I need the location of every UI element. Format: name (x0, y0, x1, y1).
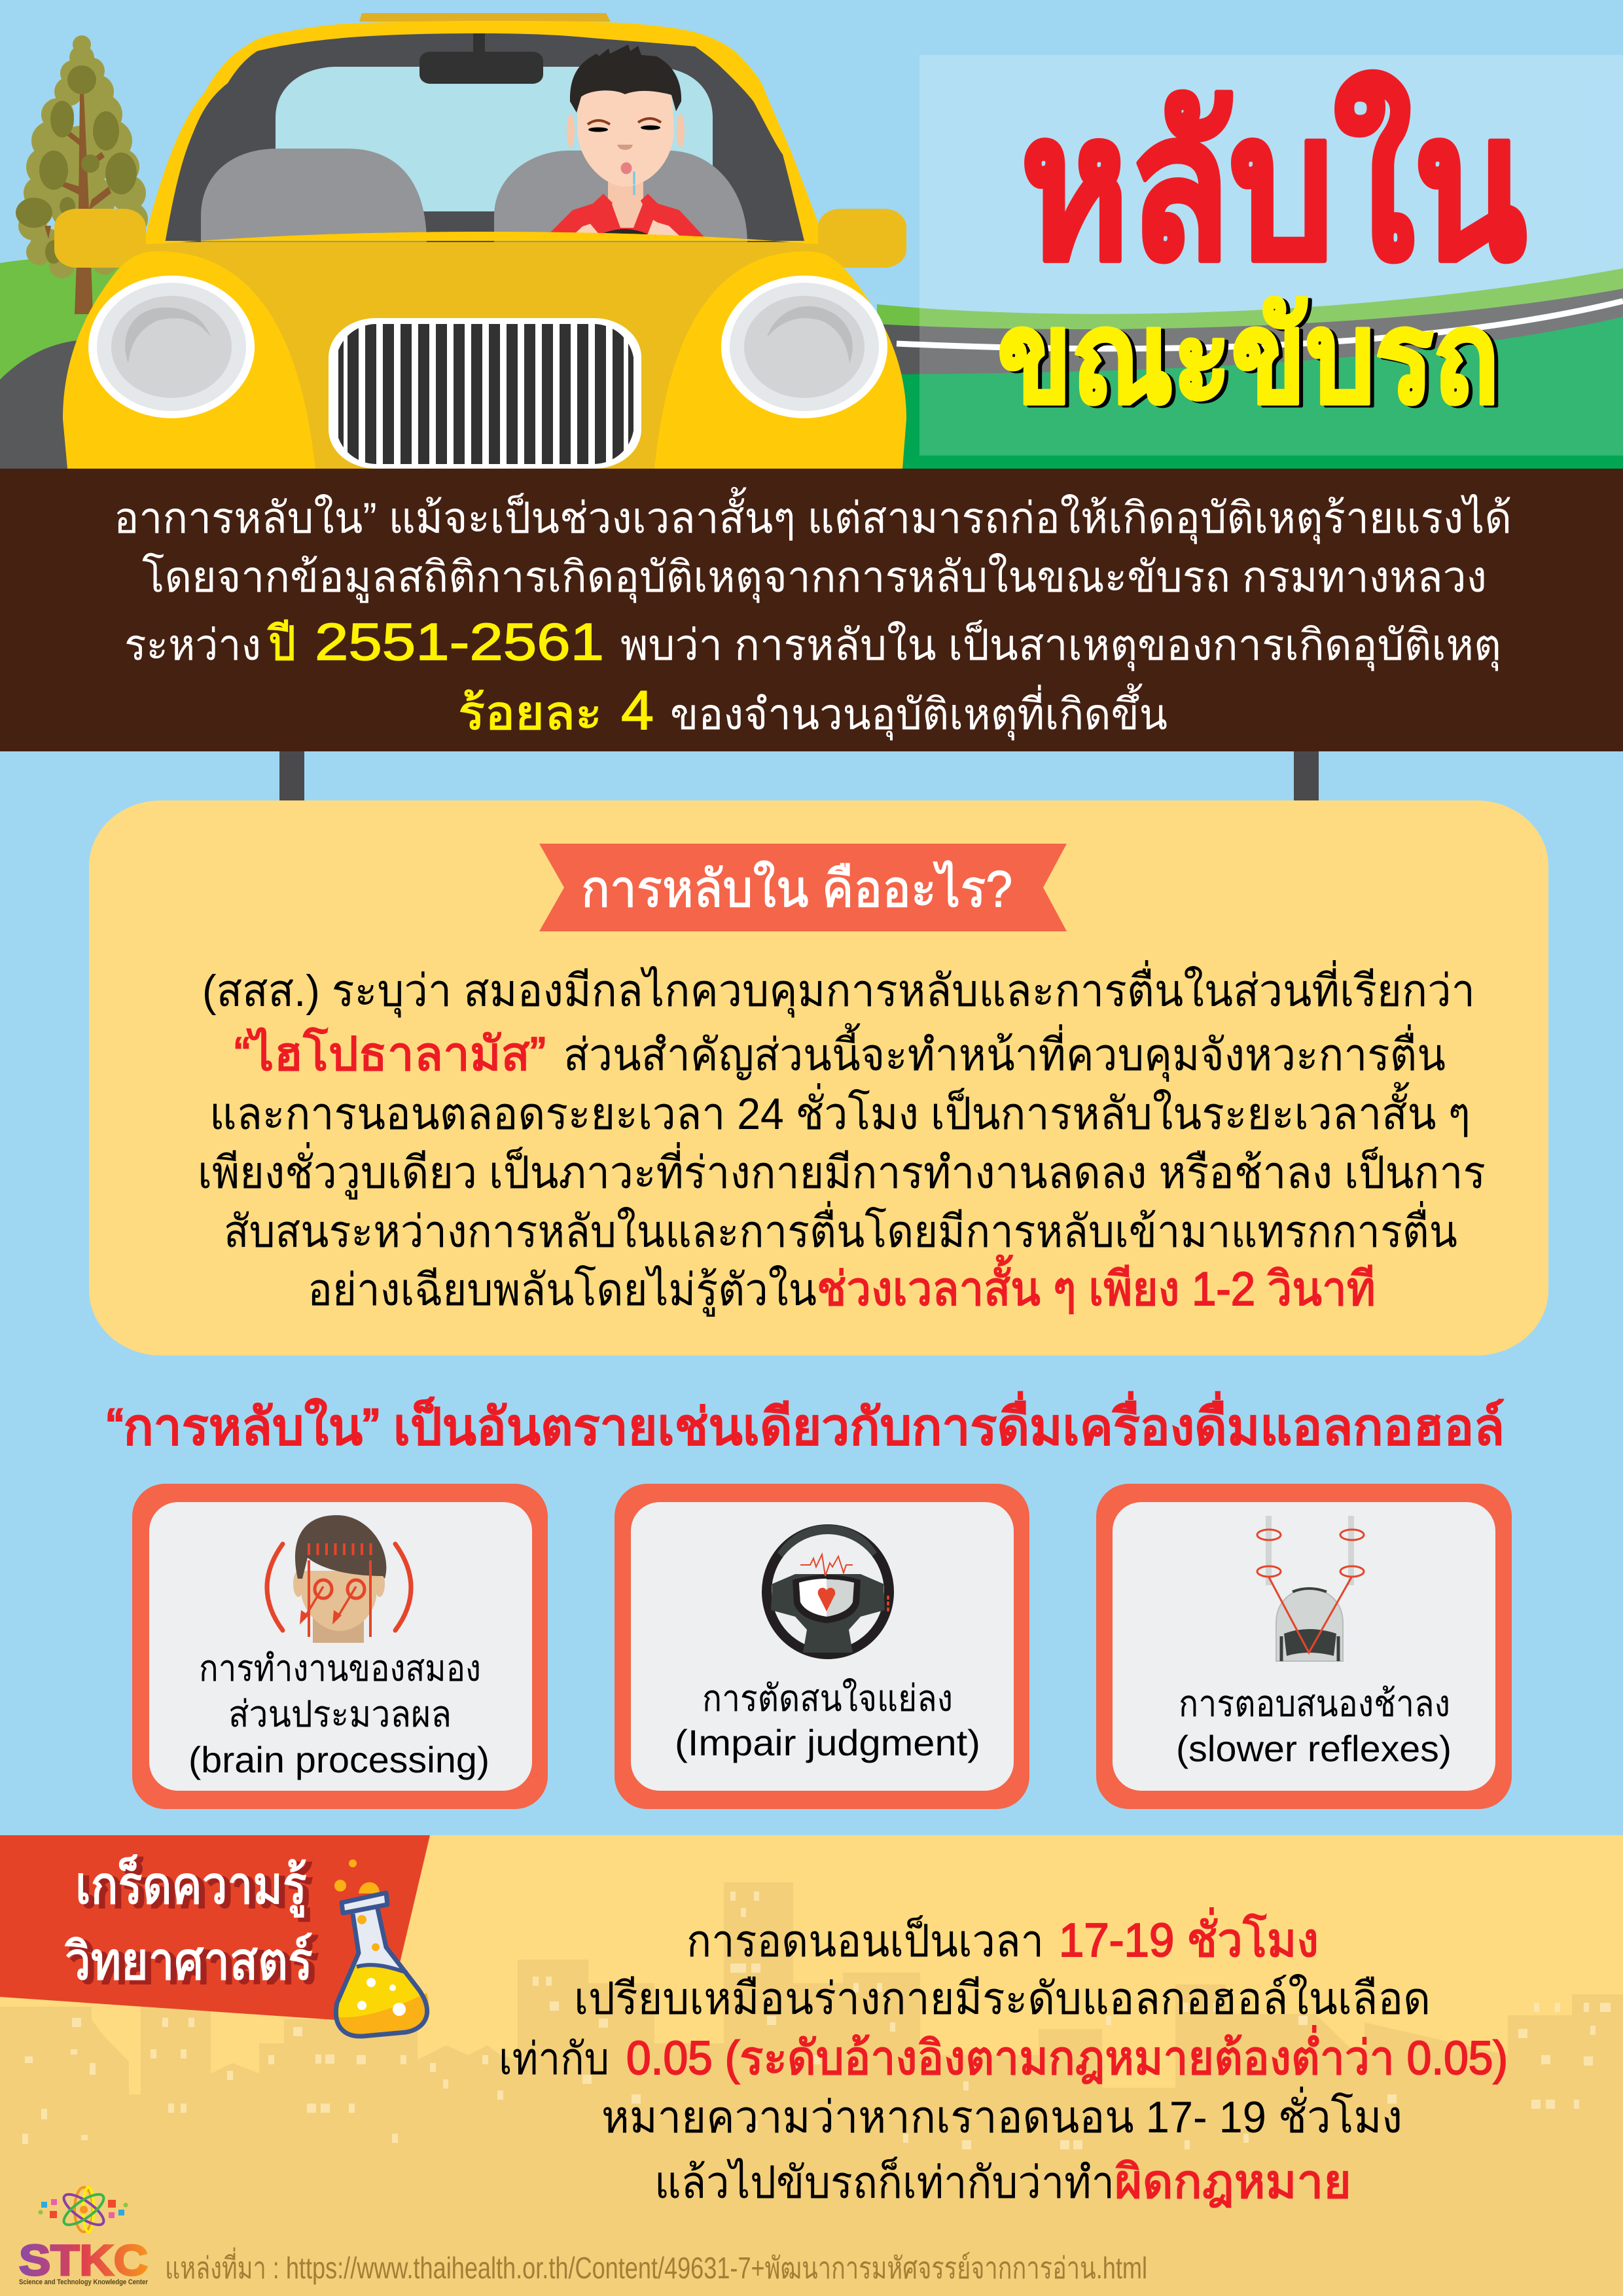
car roof (143, 21, 827, 244)
paragraph (198, 960, 1486, 1317)
card: impaired judgment: (Impair judgment) (675, 1722, 980, 1763)
fact text: 0.05 (ระดับอ้างอิงตามกฎหมายต้องต่ำว่า 0.05) (626, 2026, 1508, 2085)
intro line 3 (124, 613, 1501, 672)
car hood (128, 242, 841, 469)
card: brain processing (132, 1484, 548, 1809)
paragraph: (สสส.) ระบุว่า สมองมีกลไกควบคุมการหลับและการตื่นในส่วนที่เรียกว่า (202, 960, 1475, 1018)
side mirrors (54, 209, 906, 268)
fact text: เท่ากับ (499, 2034, 609, 2084)
panel: what is microsleep (89, 800, 1548, 1355)
right headlight (721, 276, 887, 418)
card: impaired judgment: การตัดสนใจแย่ลง (702, 1677, 953, 1719)
driver (549, 45, 705, 238)
intro line 3: พบว่า การหลับใน เป็นสาเหตุของการเกิดอุบัติเหตุ (620, 619, 1501, 672)
banner heading: วิทยาศาสตร์ (65, 1932, 313, 1990)
windshield (276, 67, 713, 216)
left fender (63, 251, 315, 469)
card: impaired judgment (615, 1484, 1029, 1809)
icon: tree (16, 35, 148, 314)
fact text: หมายความว่าหากเราอดนอน 17- 19 ชั่วโมง (601, 2087, 1402, 2142)
fact text: เปรียบเหมือนร่างกายมีระดับแอลกอฮอล์ในเลือด (574, 1973, 1431, 2024)
logo atom mark (38, 2187, 128, 2232)
right fender (654, 251, 906, 469)
card: brain processing: การทำงานของสมอง (199, 1647, 481, 1689)
icon: car view lines (1257, 1516, 1364, 1661)
logo wordmark: STKC (19, 2236, 148, 2284)
intro line 3: 2551-2561 (315, 613, 604, 671)
paragraph: ช่วงเวลาสั้น ๆ เพียง 1-2 วินาที (817, 1255, 1376, 1316)
heading: danger like alcohol: “การหลับใน” เป็นอันตรายเช่นเดียวกับการดื่มเครื่องดื่มแอลกอฮอล์ (107, 1392, 1505, 1456)
dash (419, 211, 504, 244)
card: brain processing: (brain processing) (188, 1739, 490, 1780)
panel: intro statistics band (0, 469, 1623, 751)
paragraph: และการนอนตลอดระยะเวลา 24 ชั่วโมง เป็นการหลับในระยะเวลาสั้น ๆ (209, 1082, 1471, 1139)
ribbon heading (539, 844, 1067, 931)
paragraph: เพียงชั่ววูบเดียว เป็นภาวะที่ร่างกายมีการทำงานลดลง หรือช้าลง เป็นการ (198, 1142, 1486, 1200)
paragraph: สับสนระหว่างการหลับในและการตื่นโดยมีการหลับเข้ามาแทรกการตื่น (224, 1201, 1457, 1257)
card: slower reflexes: การตอบสนองช้าลง (1179, 1683, 1450, 1724)
radiator grille (329, 318, 641, 469)
intro line 4: ของจำนวนอุบัติเหตุที่เกิดขึ้น (670, 683, 1168, 741)
rear-view mirror (419, 33, 543, 84)
intro line 3: ระหว่าง (124, 620, 261, 669)
icon: science flask (334, 1859, 429, 2036)
fact text: แล้วไปขับรถก็เท่ากับว่าทำ (654, 2157, 1115, 2208)
banner heading: วิทยาศาสตร์ (70, 1935, 318, 1994)
banner: science fact (0, 1835, 430, 2021)
paragraph: ส่วนสำคัญส่วนนี้จะทำหน้าที่ควบคุมจังหวะการตื่น (563, 1023, 1446, 1082)
left headlight (88, 276, 255, 418)
paragraph: “ไฮโปธาลามัส” (234, 1027, 546, 1081)
paragraph: อย่างเฉียบพลันโดยไม่รู้ตัวใน (308, 1265, 817, 1317)
source line: แหล่งที่มา : https://www.thaihealth.or.th/Content/49631-7+พัฒนาการมหัศจรรย์จากการอ่าน.html (165, 2247, 1147, 2285)
banner heading: เกร็ดความรู้ (80, 1857, 312, 1920)
subtitle: ขณะขับรถ: ขณะขับรถ (1001, 288, 1503, 431)
card: slower reflexes (1096, 1484, 1512, 1809)
card: brain processing: ส่วนประมวลผล (228, 1693, 452, 1734)
fact text (499, 1908, 1508, 2208)
hood top edge (143, 232, 827, 244)
panel: science fact background with city (0, 1835, 1623, 2296)
subtitle: ขณะขับรถ: ขณะขับรถ (997, 286, 1499, 429)
intro line 4: ร้อยละ (458, 687, 602, 740)
intro line 1: อาการหลับใน” แม้จะเป็นช่วงเวลาสั้นๆ แต่สามารถก่อให้เกิดอุบัติเหตุร้ายแรงได้ (114, 487, 1512, 545)
title backdrop panel (919, 55, 1623, 456)
banner heading: เกร็ดความรู้ (75, 1854, 307, 1917)
illustration: yellow car with sleepy driver (54, 13, 906, 469)
fact text: การอดนอนเป็นเวลา (687, 1915, 1044, 1966)
intro line 4: 4 (621, 679, 654, 741)
car interior (165, 33, 805, 243)
icon: head (267, 1515, 411, 1643)
card: slower reflexes: (slower reflexes) (1176, 1728, 1452, 1769)
seats (201, 149, 747, 243)
intro line 4 (458, 679, 1168, 741)
car roof tab (359, 13, 611, 22)
sign posts (279, 751, 1319, 800)
fact text: 17-19 ชั่วโมง (1059, 1908, 1319, 1967)
intro line 3: ปี (268, 618, 296, 670)
icon: steering wheel (762, 1524, 894, 1659)
banner heading (65, 1854, 318, 1994)
fact text: ผิดกฎหมาย (1115, 2156, 1351, 2208)
ribbon heading: การหลับใน คืออะไร? (581, 860, 1012, 918)
intro line 2: โดยจากข้อมูลสถิติการเกิดอุบัติเหตุจากการหลับในขณะขับรถ กรมทางหลวง (142, 552, 1487, 603)
logo caption: Science and Technology Knowledge Center (19, 2278, 149, 2286)
logo: STKC (19, 2187, 149, 2286)
background: sky (0, 0, 1623, 1835)
scene: hills and road (0, 257, 1623, 469)
